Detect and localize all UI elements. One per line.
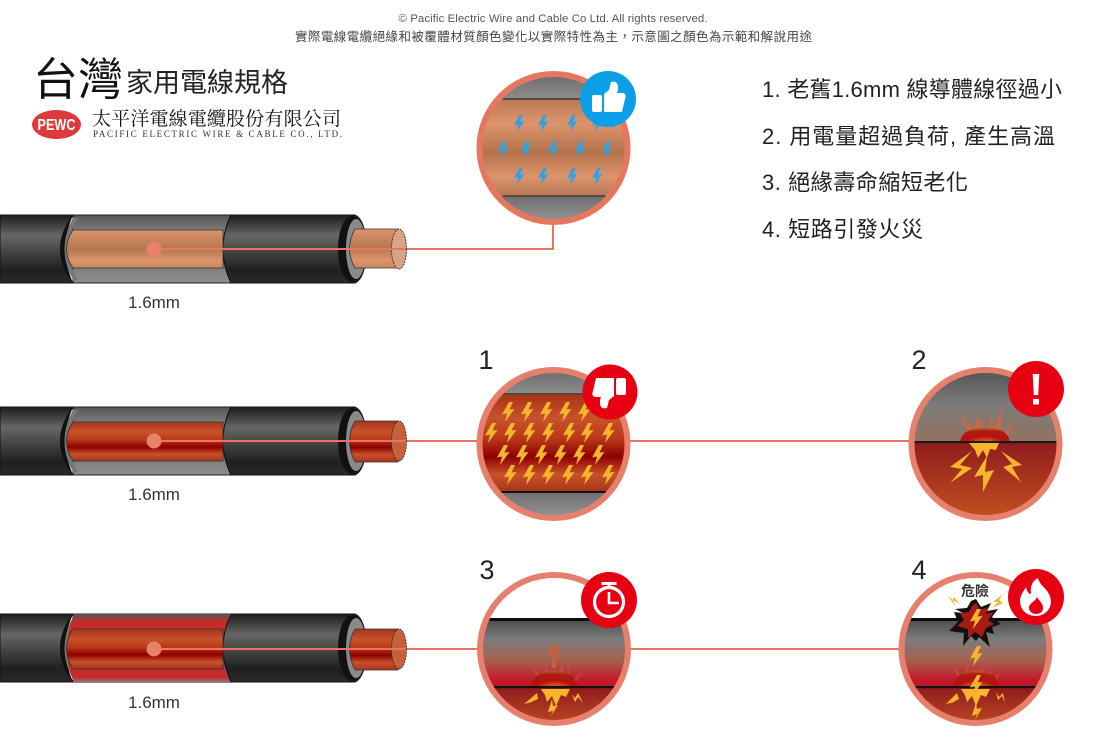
magnifier: normal current	[476, 71, 630, 225]
warning label: 危險	[961, 583, 989, 599]
connector: row 3	[154, 648, 900, 650]
icon: thumbs up	[580, 71, 636, 127]
label: wire size row 1: 1.6mm	[128, 293, 180, 312]
step number 3: 3	[479, 555, 495, 585]
cause list	[762, 77, 1062, 242]
step number 1: 1	[478, 345, 494, 375]
magnifier 2: high heat	[905, 366, 1065, 522]
magnifier 3: insulation ageing	[475, 575, 635, 727]
step number 4: 4	[911, 555, 927, 585]
magnifier 1: overload current	[476, 367, 630, 521]
cable 3: aged insulation	[0, 614, 406, 683]
company logo: PACIFIC ELECTRIC WIRE & CABLE CO., LTD.	[93, 129, 342, 139]
company logo: PEWC	[38, 117, 76, 134]
explosion star	[949, 599, 1001, 647]
title: 家用電線規格	[126, 68, 288, 98]
company logo: 太平洋電線電纜股份有限公司	[92, 108, 341, 130]
icon: stopwatch	[581, 572, 637, 628]
icon: thumbs down	[582, 364, 638, 420]
icon: warning exclamation	[1008, 361, 1064, 417]
step number 2: 2	[911, 345, 927, 375]
connector: normal cable to magnifier	[154, 224, 553, 249]
cause list: 3. 絕緣壽命縮短老化	[762, 170, 968, 195]
label: wire size row 2: 1.6mm	[128, 485, 180, 504]
cable 2: overheated conductor	[0, 407, 406, 475]
title	[33, 54, 288, 105]
cable 1: normal copper conductor	[0, 215, 406, 283]
cause list: 1. 老舊1.6mm 線導體線徑過小	[762, 77, 1062, 102]
cause list: 4. 短路引發火災	[762, 217, 923, 242]
disclaimer note: 實際電線電纜絕緣和被覆體材質顏色變化以實際特性為主，示意圖之顏色為示範和解說用途	[295, 29, 812, 44]
copyright notice: © Pacific Electric Wire and Cable Co Ltd. All rights reserved.	[398, 13, 708, 25]
magnifier 4: short circuit fire	[895, 575, 1055, 727]
label: wire size row 3: 1.6mm	[128, 693, 180, 712]
cause list: 2. 用電量超過負荷, 產生高溫	[762, 124, 1055, 149]
company logo	[32, 108, 342, 139]
connector: row 2	[154, 440, 910, 442]
icon: flame	[1008, 569, 1064, 625]
title: 台灣	[33, 54, 123, 105]
